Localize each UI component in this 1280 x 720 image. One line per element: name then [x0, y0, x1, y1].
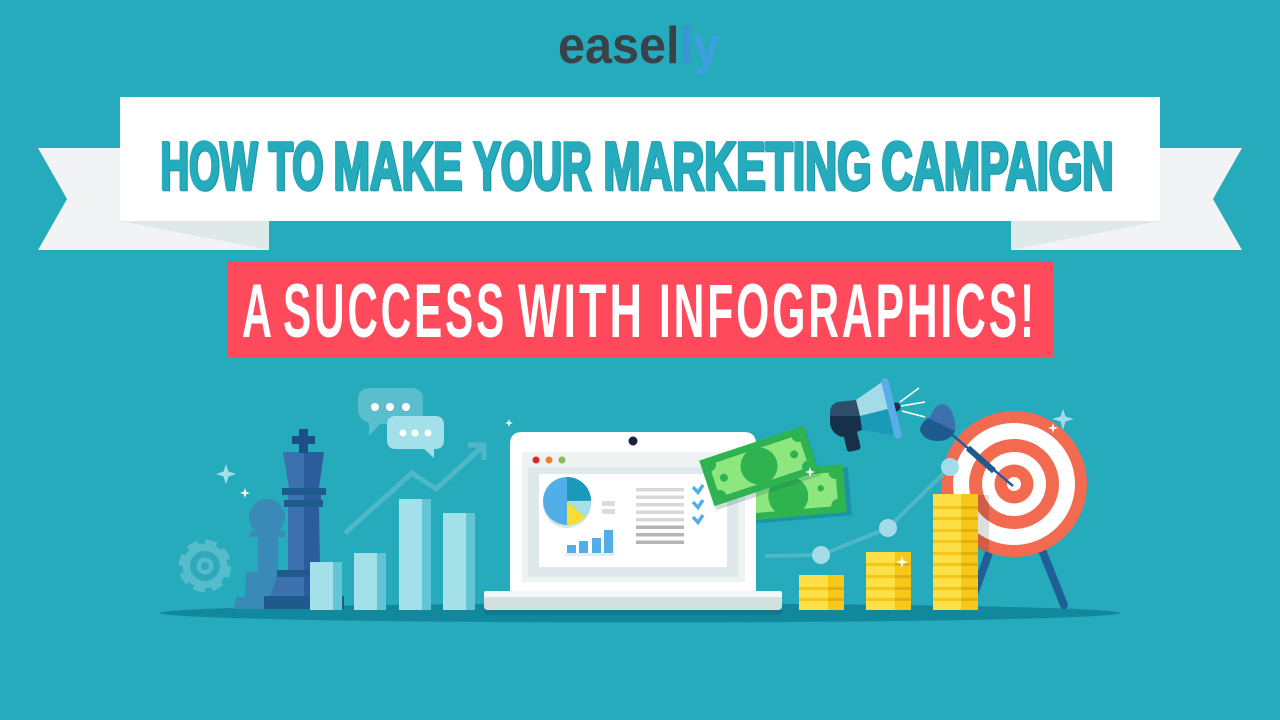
icon: chess king: [264, 429, 344, 609]
coin stack: medium: [866, 552, 911, 610]
subtitle band: A: [242, 269, 272, 354]
icon: bullseye target: [941, 411, 1087, 557]
sparkles: target: [1048, 409, 1074, 433]
icon: target legs: [972, 550, 1064, 605]
subtitle band: WITH: [518, 269, 645, 354]
title: first line: MARKETING: [603, 128, 871, 204]
text lines: [636, 488, 684, 544]
arrow: growth trend: [345, 445, 484, 533]
icon: dart: [920, 404, 1013, 486]
icon: back banknote: [733, 464, 852, 525]
title: first line: TO: [268, 128, 323, 204]
title: first line: MAKE: [333, 128, 462, 204]
subtitle band: SUCCESS: [283, 269, 507, 354]
line chart with nodes: [765, 458, 959, 564]
title: first line: [160, 128, 1113, 204]
title: first line: CAMPAIGN: [881, 128, 1113, 204]
sparkles: left: [216, 419, 513, 498]
laptop screen: [522, 452, 745, 582]
logo: easelly: easelly: [558, 17, 720, 75]
laptop: [484, 432, 782, 615]
bar chart: growth bars: [310, 499, 475, 610]
mini bar chart: [565, 530, 615, 556]
legend swatches: [602, 501, 615, 514]
coin stack: large: [933, 494, 978, 610]
coin stack: small: [799, 575, 844, 610]
check marks: [693, 485, 703, 522]
banner: white ribbon: [38, 97, 1242, 250]
pie chart: [543, 477, 591, 528]
icon: gear: [182, 542, 228, 590]
icon: front banknote: [699, 426, 821, 510]
speech bubbles: [358, 388, 444, 458]
title: first line: YOUR: [473, 128, 591, 204]
ground shadow: [160, 604, 1120, 622]
title: first line: HOW: [160, 128, 257, 204]
subtitle band: [227, 261, 1053, 357]
icon: chess pawn: [233, 499, 285, 609]
icon: megaphone: [830, 382, 925, 452]
